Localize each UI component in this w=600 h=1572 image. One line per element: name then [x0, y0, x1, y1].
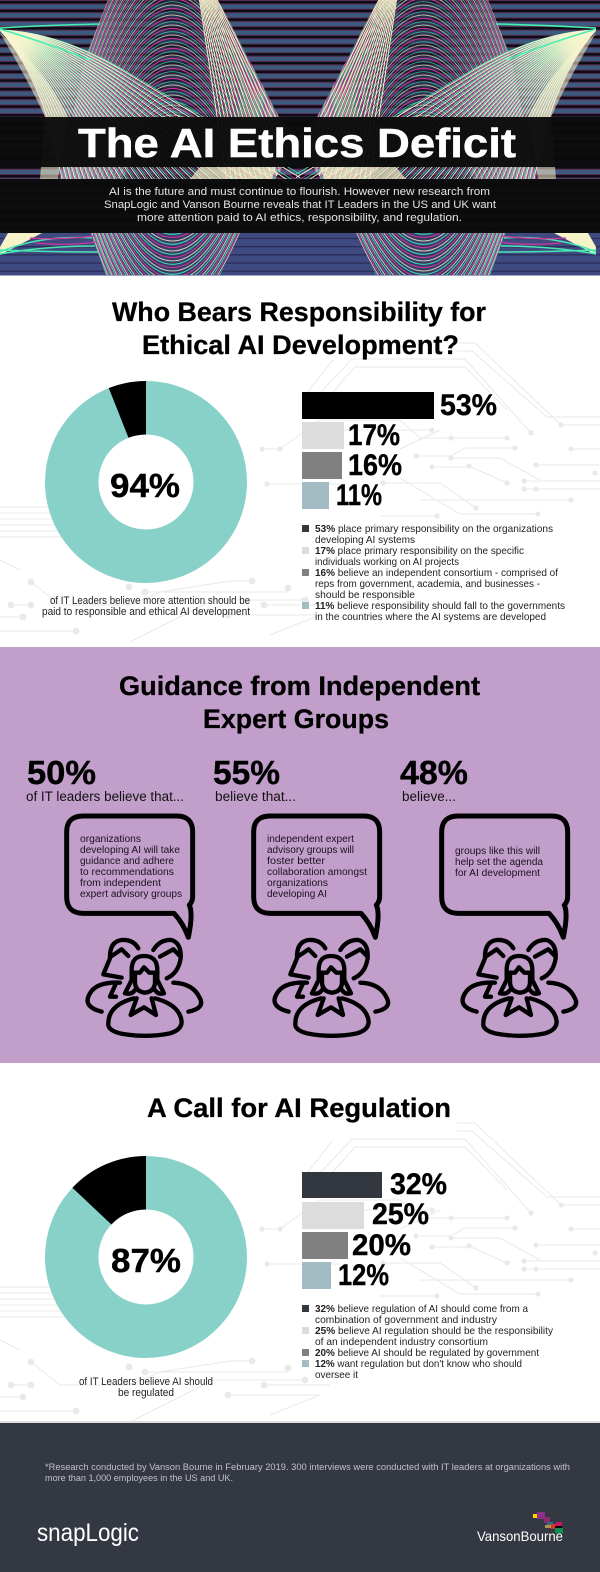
legend: regulation: combination of government and industry	[315, 1315, 498, 1326]
bar chart: responsibility: 17%	[348, 419, 400, 452]
panel: header artwork	[0, 0, 600, 543]
bar chart: regulation: 20%	[352, 1229, 411, 1262]
intro text band: more attention paid to AI ethics, responsibility, and regulation.	[137, 212, 462, 224]
legend: responsibility: 11% believe responsibility should fall to the governments	[315, 601, 565, 612]
circuit background: regulation section	[0, 1123, 600, 1422]
legend: responsibility: 17% place primary responsibility on the specific	[315, 546, 524, 557]
caption: 94%: of IT Leaders believe more attention should be	[50, 595, 250, 607]
column: 55%: advisory groups will	[267, 845, 354, 856]
column: 48%: for AI development	[455, 868, 540, 879]
circuit background: responsibility section	[0, 343, 600, 642]
column: 55%: developing AI	[267, 889, 327, 900]
title band	[0, 117, 600, 167]
donut chart: 87%: 87%	[111, 1242, 181, 1279]
bar chart: responsibility: 11%	[336, 479, 382, 512]
column: 50%: 50%	[27, 754, 96, 791]
legend: responsibility: developing AI systems	[315, 535, 415, 546]
column: 48%	[400, 754, 576, 1036]
bar chart: responsibility: 53%	[440, 389, 497, 422]
caption: 87%	[79, 1376, 213, 1399]
column: 48%: groups like this will	[455, 846, 540, 857]
legend: responsibility: 53% place primary responsibility on the organizations	[315, 524, 553, 535]
caption: 94%: paid to responsible and ethical AI development	[42, 606, 250, 618]
intro text band: AI is the future and must continue to flourish. However new research from	[109, 186, 490, 198]
column: 50%: guidance and adhere	[80, 856, 174, 867]
heading: guidance: Expert Groups	[203, 704, 389, 734]
bar chart: regulation: 32%	[390, 1168, 447, 1201]
logo: snapLogic: snapLogic	[37, 1519, 139, 1547]
panel: footer	[0, 1421, 600, 1572]
legend: responsibility: in the countries where the AI systems are developed	[315, 612, 546, 623]
legend: regulation: of an independent industry consortium	[315, 1337, 488, 1348]
legend: responsibility: reps from government, academia, and businesses -	[315, 579, 540, 590]
caption: 87%: be regulated	[118, 1387, 174, 1399]
column: 50%: developing AI will take	[80, 845, 180, 856]
column: 55%	[213, 754, 388, 1036]
legend: regulation: 20% believe AI should be regulated by government	[315, 1348, 539, 1359]
column: 50%: expert advisory groups	[80, 889, 182, 900]
column: 50%: to recommendations	[80, 867, 174, 878]
donut chart: 94%: 94%	[110, 467, 180, 504]
column: 48%: 48%	[400, 754, 468, 791]
column: 50%	[26, 754, 201, 1036]
caption: 87%: of IT Leaders believe AI should	[79, 1376, 213, 1388]
column: 48%: help set the agenda	[455, 857, 543, 868]
bar chart: regulation	[302, 1168, 447, 1292]
donut chart: 87%	[72, 1156, 220, 1331]
column: 55%: organizations	[267, 878, 328, 889]
column: 50%: of IT leaders believe that...	[26, 789, 184, 804]
legend: regulation: 12% want regulation but don't know who should	[315, 1359, 522, 1370]
column: 55%: collaboration amongst	[267, 867, 367, 878]
legend: regulation	[302, 1304, 554, 1381]
bar chart: regulation: 12%	[338, 1259, 389, 1292]
heading: regulation: A Call for AI Regulation	[147, 1093, 451, 1123]
footnote: *Research conducted by Vanson Bourne in February 2019. 300 interviews were conducted with IT leaders at organizations with	[45, 1462, 570, 1473]
logo: VansonBourne	[477, 1512, 563, 1544]
column: 55%: independent expert	[267, 834, 354, 845]
footnote	[45, 1462, 570, 1484]
bar chart: responsibility: 16%	[348, 449, 402, 482]
heading: responsibility: Who Bears Responsibility for	[112, 297, 486, 327]
legend: regulation: 25% believe AI regulation should be the responsibility	[315, 1326, 554, 1337]
legend: responsibility: individuals working on AI projects	[315, 557, 459, 568]
logo: VansonBourne: VansonBourne	[477, 1528, 563, 1544]
panel: guidance from independent expert groups	[0, 647, 600, 1063]
intro text band	[0, 179, 600, 233]
heading: guidance	[119, 671, 480, 734]
column: 55%: 55%	[213, 754, 280, 791]
heading: guidance: Guidance from Independent	[119, 671, 480, 701]
bar chart: responsibility	[302, 389, 497, 512]
column: 50%: organizations	[80, 834, 141, 845]
legend: responsibility	[302, 524, 565, 623]
bar chart: regulation: 25%	[372, 1198, 429, 1231]
column: 55%: foster better	[267, 856, 326, 867]
legend: regulation: 32% believe regulation of AI should come from a	[315, 1304, 528, 1315]
caption: 94%	[42, 595, 250, 618]
legend: responsibility: 16% believe an independent consortium - comprised of	[315, 568, 558, 579]
column: 48%: believe...	[402, 789, 456, 804]
legend: responsibility: should be responsible	[315, 590, 415, 601]
footnote: more than 1,000 employees in the US and UK.	[45, 1473, 233, 1484]
column: 55%: believe that...	[215, 789, 296, 804]
donut chart: 94%	[72, 381, 220, 556]
title band: The AI Ethics Deficit	[78, 120, 516, 166]
legend: regulation: oversee it	[315, 1370, 358, 1381]
column: 50%: from independent	[80, 878, 161, 889]
heading: responsibility: Ethical AI Development?	[142, 330, 459, 360]
heading: responsibility	[112, 297, 486, 360]
intro text band: SnapLogic and Vanson Bourne reveals that IT Leaders in the US and UK want	[104, 199, 497, 211]
